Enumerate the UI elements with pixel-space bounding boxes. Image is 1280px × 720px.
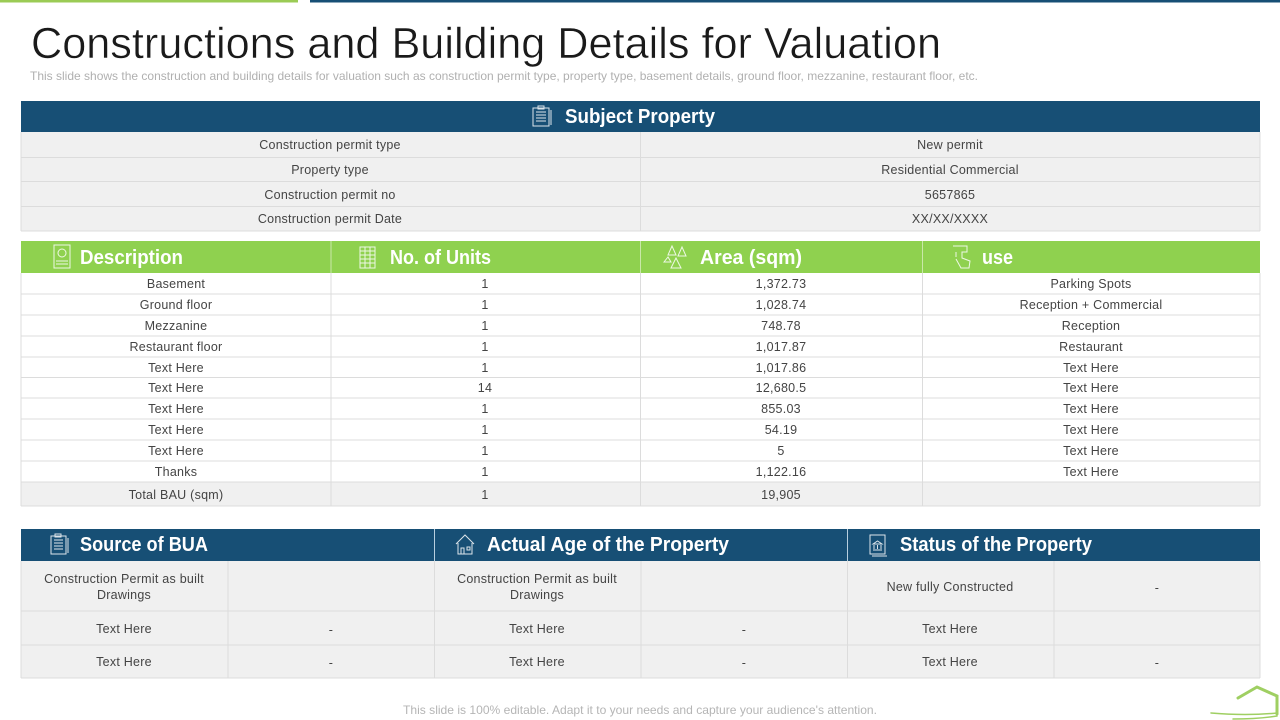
units table rows: Text Here [1063,402,1119,416]
units table rows: Text Here [148,381,204,395]
units table rows: Text Here [1063,381,1119,395]
subject property rows: Construction permit type [259,138,401,152]
source, age and status header: Actual Age of the Property [487,534,730,556]
source, age and status header: Source of BUA [80,534,208,556]
units table header [21,241,1260,273]
subject property header: Subject Property [565,106,716,128]
panel: subject property [21,101,1260,231]
source, age and status rows: Text Here [509,622,565,636]
units table rows: 1 [481,361,489,375]
subject property header [21,101,1260,132]
panel: units table [21,241,1260,506]
units table rows: 1 [481,319,489,333]
units table rows: 1 [481,423,489,437]
top accent bars [0,0,1280,2]
units table rows: 1 [481,465,489,479]
icon: certificate [54,245,70,268]
units table rows: Restaurant floor [130,340,222,354]
units table rows: Restaurant [1059,340,1123,354]
units table rows: Reception + Commercial [1020,298,1162,312]
footer note: This slide is 100% editable. Adapt it to your needs and capture your audience's attention. [403,703,877,717]
units table rows: 54.19 [765,423,797,437]
units table rows: Text Here [148,423,204,437]
icon: hand pointer [953,246,970,268]
subject property rows [21,132,1260,231]
units table rows: 1,017.87 [756,340,806,354]
units table rows: 1,122.16 [756,465,806,479]
units table rows: Thanks [155,465,197,479]
subject property rows: Construction permit no [264,188,396,202]
units table rows: Text Here [1063,444,1119,458]
units table rows: 1 [481,402,489,416]
units table rows: 1,028.74 [756,298,806,312]
source, age and status rows: Construction Permit as built [457,572,617,586]
source, age and status rows: New fully Constructed [887,580,1013,594]
units table header: Area (sqm) [700,247,802,269]
source, age and status rows: Text Here [922,622,978,636]
source, age and status rows: Construction Permit as built [44,572,204,586]
icon: bank document [870,535,887,556]
units table rows: 748.78 [761,319,801,333]
subject property rows: Property type [291,163,369,177]
units table rows: 1,017.86 [756,361,806,375]
source, age and status rows [21,561,1260,678]
icon: green house logo [1211,687,1277,719]
subject property rows: New permit [917,138,983,152]
units table rows [21,273,1260,506]
source, age and status rows: - [329,623,333,637]
source, age and status rows: - [329,656,333,670]
subject property rows: Construction permit Date [258,212,402,226]
units table rows: Total BAU (sqm) [129,488,223,502]
subject property rows: XX/XX/XXXX [912,212,988,226]
units table rows: 1 [481,488,489,502]
source, age and status rows: Drawings [510,588,564,602]
units table rows: Parking Spots [1050,277,1132,291]
source, age and status header: Status of the Property [900,534,1093,556]
source, age and status rows: Text Here [922,655,978,669]
icon: traffic cones [664,246,686,268]
units table rows: 1 [481,444,489,458]
source, age and status rows: Text Here [96,655,152,669]
subject property rows: 5657865 [925,188,975,202]
title: Constructions and Building Details for Valuation [31,19,941,68]
units table rows: 5 [777,444,785,458]
units table rows: Text Here [148,444,204,458]
units table rows: Ground floor [140,298,212,312]
subtitle: This slide shows the construction and building details for valuation such as construction permit type, property type, basement details, ground floor, mezzanine, restaurant floor, etc. [30,69,978,83]
units table rows: Text Here [1063,361,1119,375]
source, age and status rows: Text Here [509,655,565,669]
source, age and status rows: - [742,656,746,670]
source, age and status rows: - [1155,656,1159,670]
icon: clipboard [51,534,68,554]
icon: building [360,247,375,268]
panel: source, age and status [21,529,1260,678]
source, age and status rows: - [1155,581,1159,595]
units table rows: Reception [1062,319,1120,333]
units table rows: 855.03 [761,402,801,416]
units table rows: Text Here [1063,423,1119,437]
units table rows: 14 [478,381,492,395]
units table rows: Text Here [1063,465,1119,479]
units table rows: 12,680.5 [756,381,806,395]
units table rows: Text Here [148,361,204,375]
subject property rows: Residential Commercial [881,163,1019,177]
units table header: Description [80,247,183,269]
icon: clipboard [533,106,551,126]
source, age and status rows: - [742,623,746,637]
units table header: use [982,247,1013,269]
units table rows: 19,905 [761,488,801,502]
icon: houses [456,535,474,554]
units table rows: 1 [481,277,489,291]
units table rows: Text Here [148,402,204,416]
source, age and status rows: Drawings [97,588,151,602]
units table rows: Mezzanine [145,319,207,333]
units table rows: 1 [481,340,489,354]
units table header: No. of Units [390,247,491,269]
source, age and status rows: Text Here [96,622,152,636]
source, age and status header [21,529,1260,561]
units table rows: 1 [481,298,489,312]
units table rows: Basement [147,277,205,291]
units table rows: 1,372.73 [756,277,806,291]
